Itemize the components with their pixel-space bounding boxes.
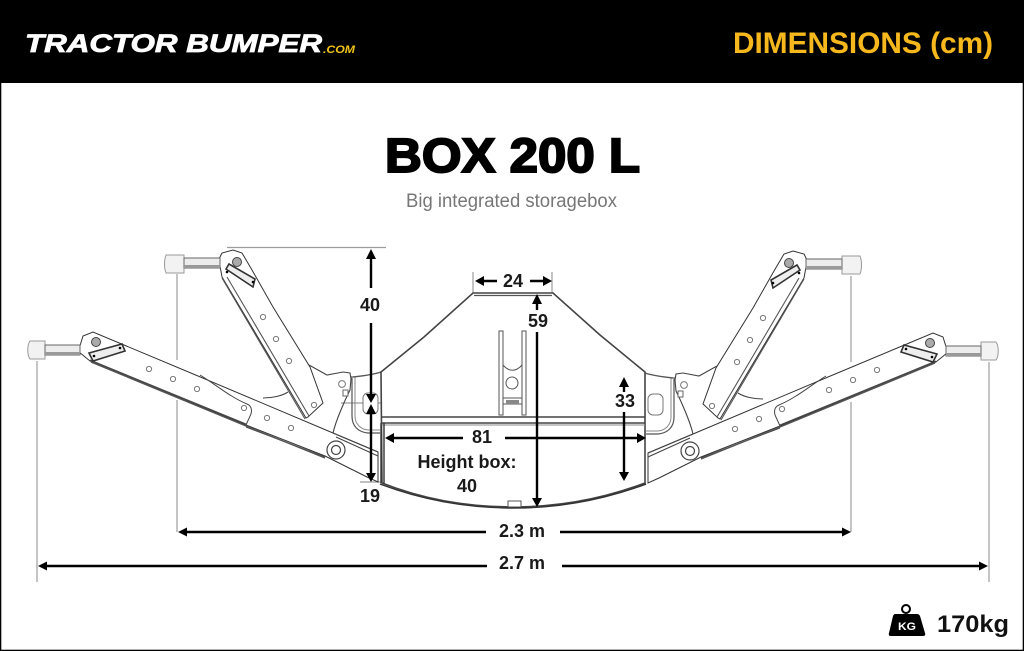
dimension: 59: 59 — [528, 311, 548, 331]
dimension: 81 — [385, 427, 646, 447]
dimension: 24 — [475, 271, 552, 291]
center bracket — [499, 331, 526, 415]
header title: DIMENSIONS (cm) — [733, 27, 993, 60]
tractor arms left — [28, 250, 381, 482]
dimension: 33: 33 — [615, 391, 635, 411]
title: BOX 200 L — [385, 130, 640, 183]
dimension: 2.3 m: 2.3 m — [499, 521, 545, 541]
dimension: 81: 81 — [472, 427, 492, 447]
dimension: 2.3 m — [178, 521, 851, 541]
dimension: 19: 19 — [360, 486, 380, 506]
dimension: 40 left — [360, 249, 380, 403]
header bar — [0, 0, 1024, 83]
tractor arms right — [645, 251, 998, 483]
dimension: 2.7 m — [38, 553, 988, 573]
dimension: 2.7 m: 2.7 m — [499, 553, 545, 573]
icon: weight — [889, 605, 925, 636]
label: height box: 40 — [457, 476, 477, 496]
dimension: 33 — [615, 377, 635, 481]
logo: .COM — [323, 44, 356, 56]
weight value: 170kg — [937, 611, 1009, 638]
dimension: 59 — [528, 294, 548, 507]
storage box — [380, 293, 646, 508]
label: height box — [418, 452, 516, 496]
logo: TRACTOR BUMPER — [25, 30, 322, 58]
extension lines — [37, 248, 989, 582]
dimension: 24: 24 — [503, 271, 523, 291]
subtitle: Big integrated storagebox — [406, 191, 617, 212]
dimension: 19 — [360, 404, 380, 506]
dimension: 40 left: 40 — [360, 295, 380, 315]
icon: weight: KG — [898, 621, 916, 633]
label: height box: Height box: — [418, 452, 516, 472]
